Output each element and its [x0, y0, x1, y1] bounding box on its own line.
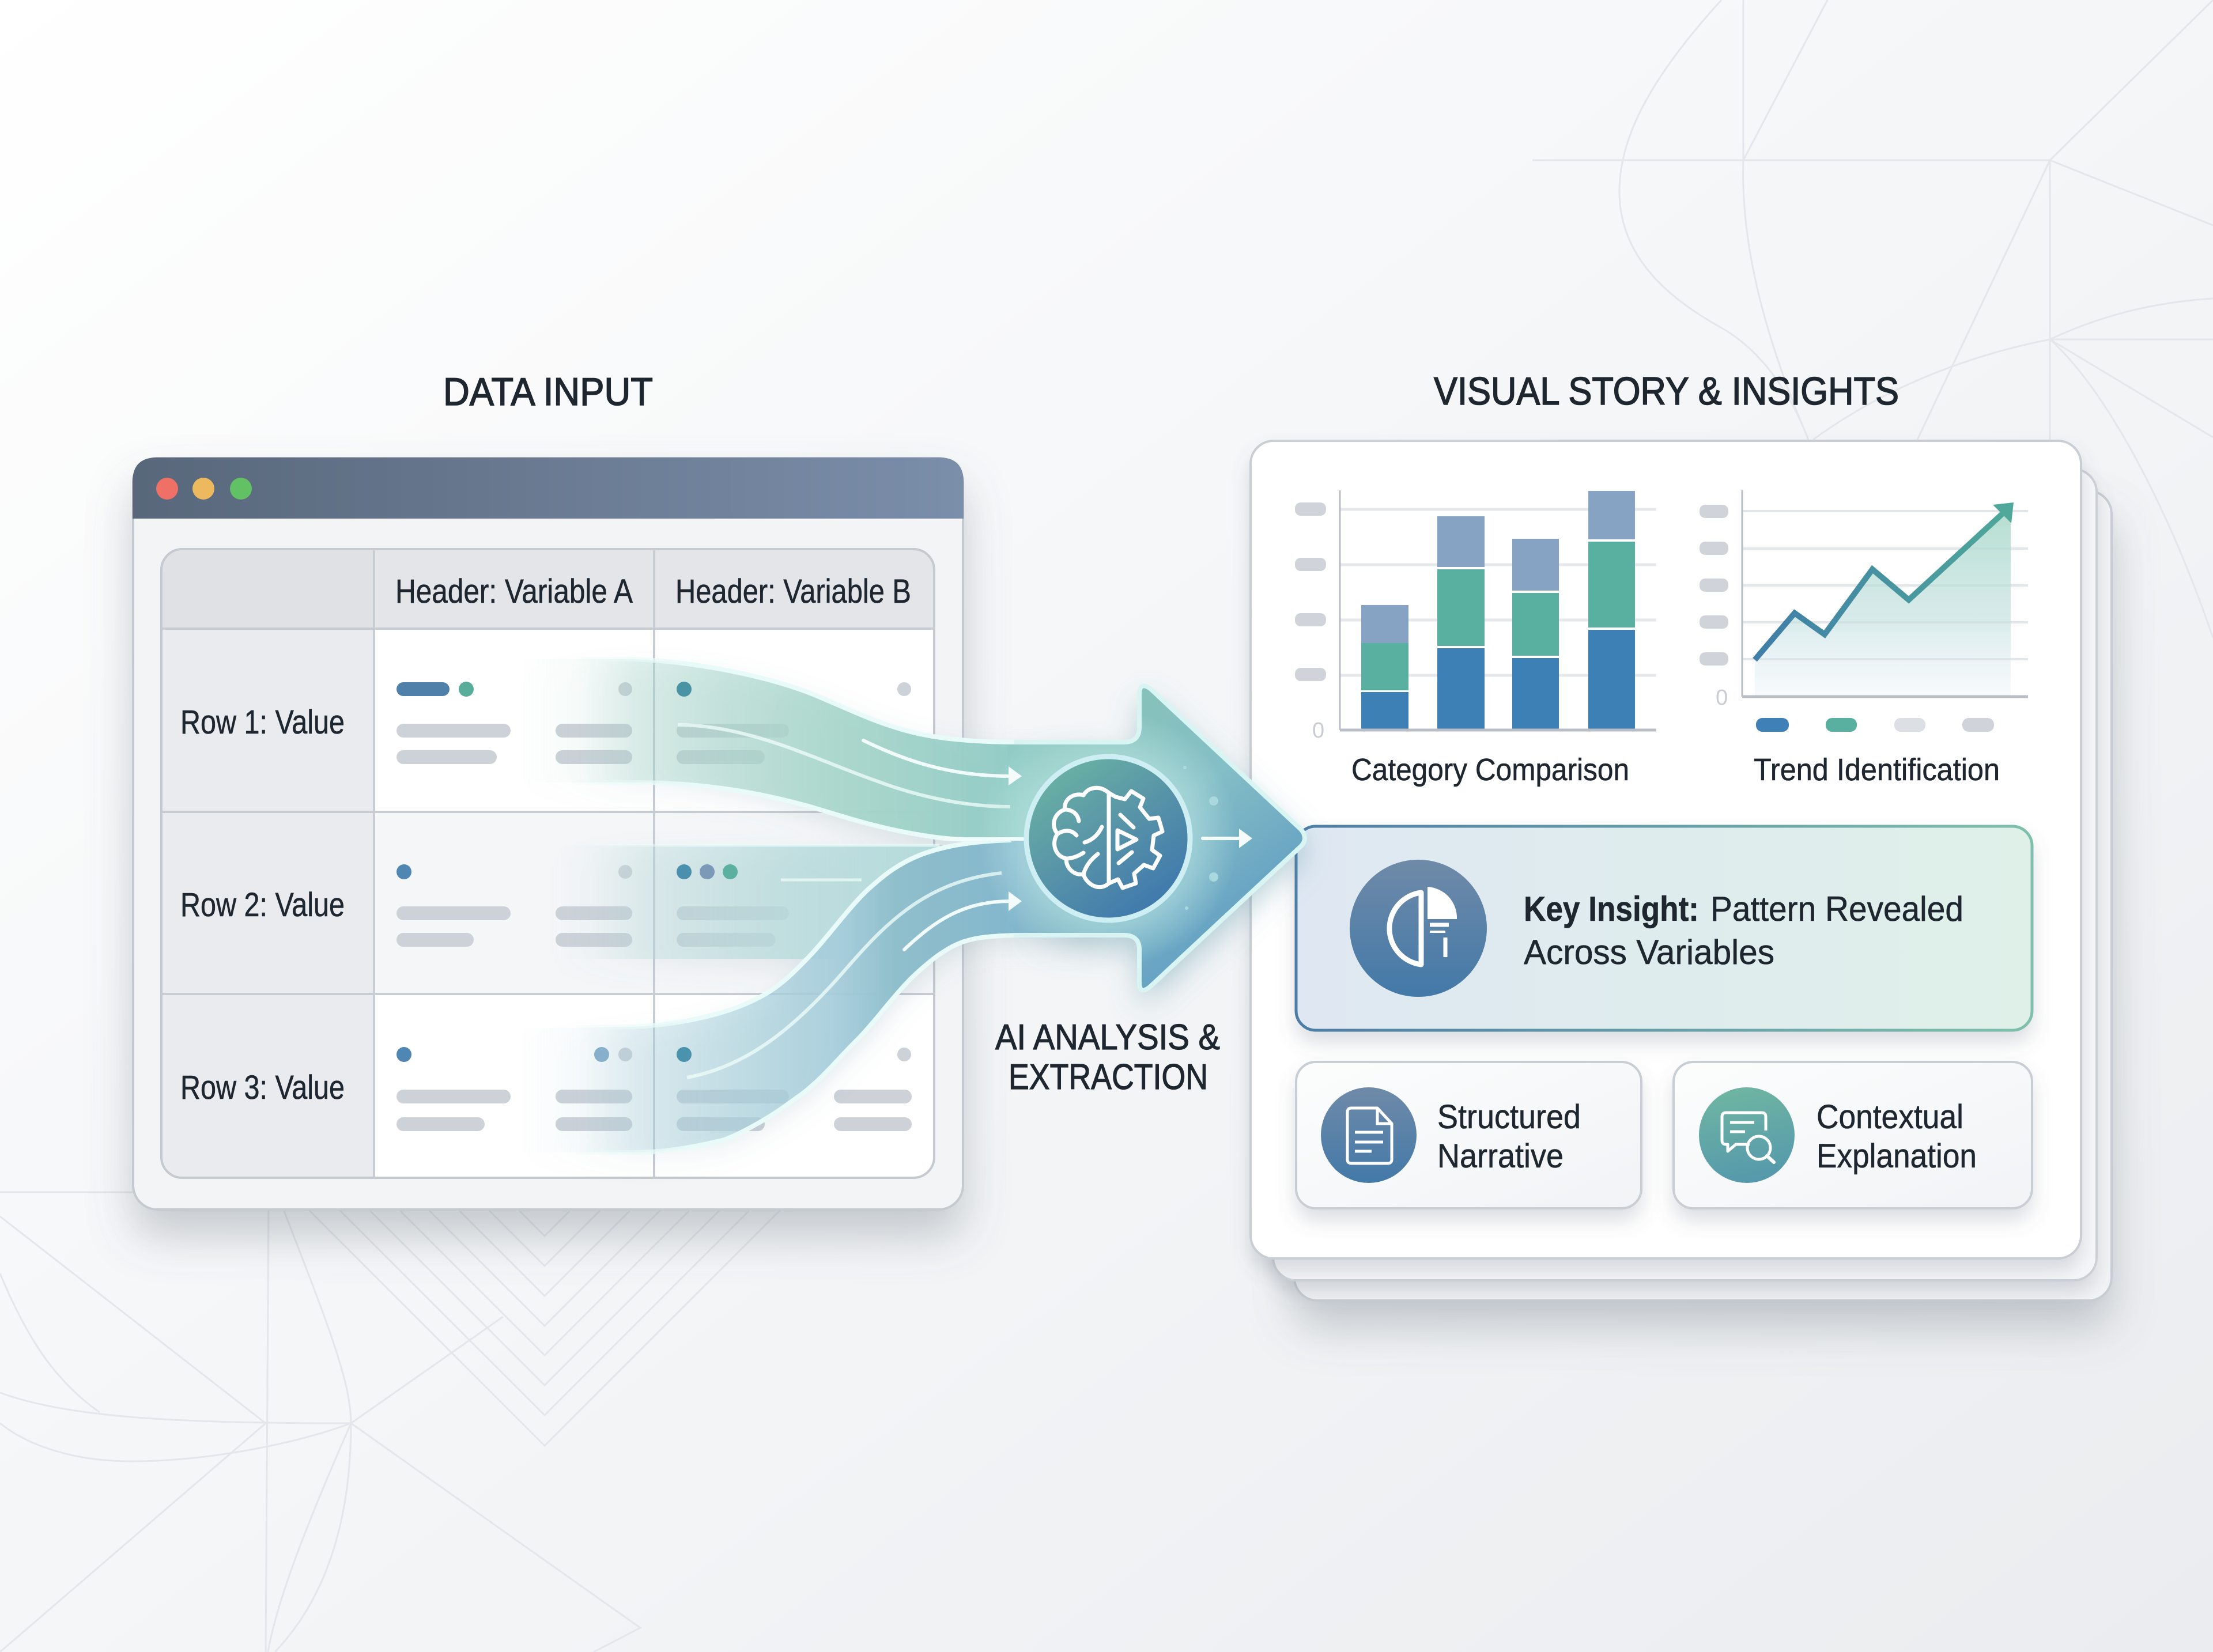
heading: visual story and insights: VISUAL STORY & INSIGHTS	[1434, 369, 1899, 413]
line chart: trend identification: 0	[1716, 686, 1728, 710]
chart label: category comparison: Category Comparison	[1351, 753, 1629, 787]
structured narrative text: Structured	[1437, 1098, 1581, 1136]
central analysis arrow	[863, 686, 1305, 991]
data table	[161, 549, 934, 1178]
line chart: trend identification	[1700, 490, 2028, 732]
key insight text: Key Insight:	[1524, 890, 1699, 928]
chart label: trend identification: Trend Identification	[1754, 753, 2000, 787]
window title bar	[133, 458, 964, 519]
label: AI analysis and extraction: AI ANALYSIS &	[995, 1018, 1220, 1057]
row label 3: Row 3: Value	[180, 1069, 345, 1106]
label: AI analysis and extraction	[995, 1018, 1220, 1097]
structured narrative text: Narrative	[1437, 1137, 1564, 1175]
structured narrative text	[1437, 1098, 1581, 1175]
key insight text: Pattern Revealed	[1710, 890, 1963, 928]
column B dots above streams	[677, 682, 738, 1062]
table cell placeholders	[396, 682, 912, 1131]
key insight text	[1524, 890, 1963, 971]
icon: document	[1321, 1087, 1417, 1183]
chart legend	[1756, 718, 1994, 732]
label: AI analysis and extraction: EXTRACTION	[1009, 1057, 1208, 1097]
icon: chat and magnifier	[1699, 1087, 1795, 1183]
row label 1: Row 1: Value	[180, 704, 345, 741]
panel: data input browser window	[133, 458, 964, 1209]
bar chart: category comparison: 0	[1312, 719, 1324, 743]
contextual explanation text: Explanation	[1817, 1137, 1977, 1175]
key insight text: Across Variables	[1524, 933, 1774, 971]
icon: AI brain and gear	[1026, 757, 1190, 920]
contextual explanation text: Contextual	[1817, 1098, 1963, 1136]
callout: key insight	[1296, 826, 2032, 1030]
card: structured narrative	[1296, 1062, 1641, 1208]
icon: pie chart	[1350, 860, 1487, 997]
column header A: Header: Variable A	[395, 573, 633, 610]
card: contextual explanation	[1674, 1062, 2032, 1208]
flow arrows inside streams	[863, 740, 1239, 950]
panel: visual story stacked cards	[1251, 441, 2112, 1301]
column header B: Header: Variable B	[675, 573, 911, 610]
bar chart: category comparison	[1295, 490, 1656, 743]
row label 2: Row 2: Value	[180, 886, 345, 924]
heading: data input: DATA INPUT	[443, 370, 653, 414]
data streams flowing into arrow	[523, 659, 1095, 1152]
contextual explanation text	[1817, 1098, 1977, 1175]
